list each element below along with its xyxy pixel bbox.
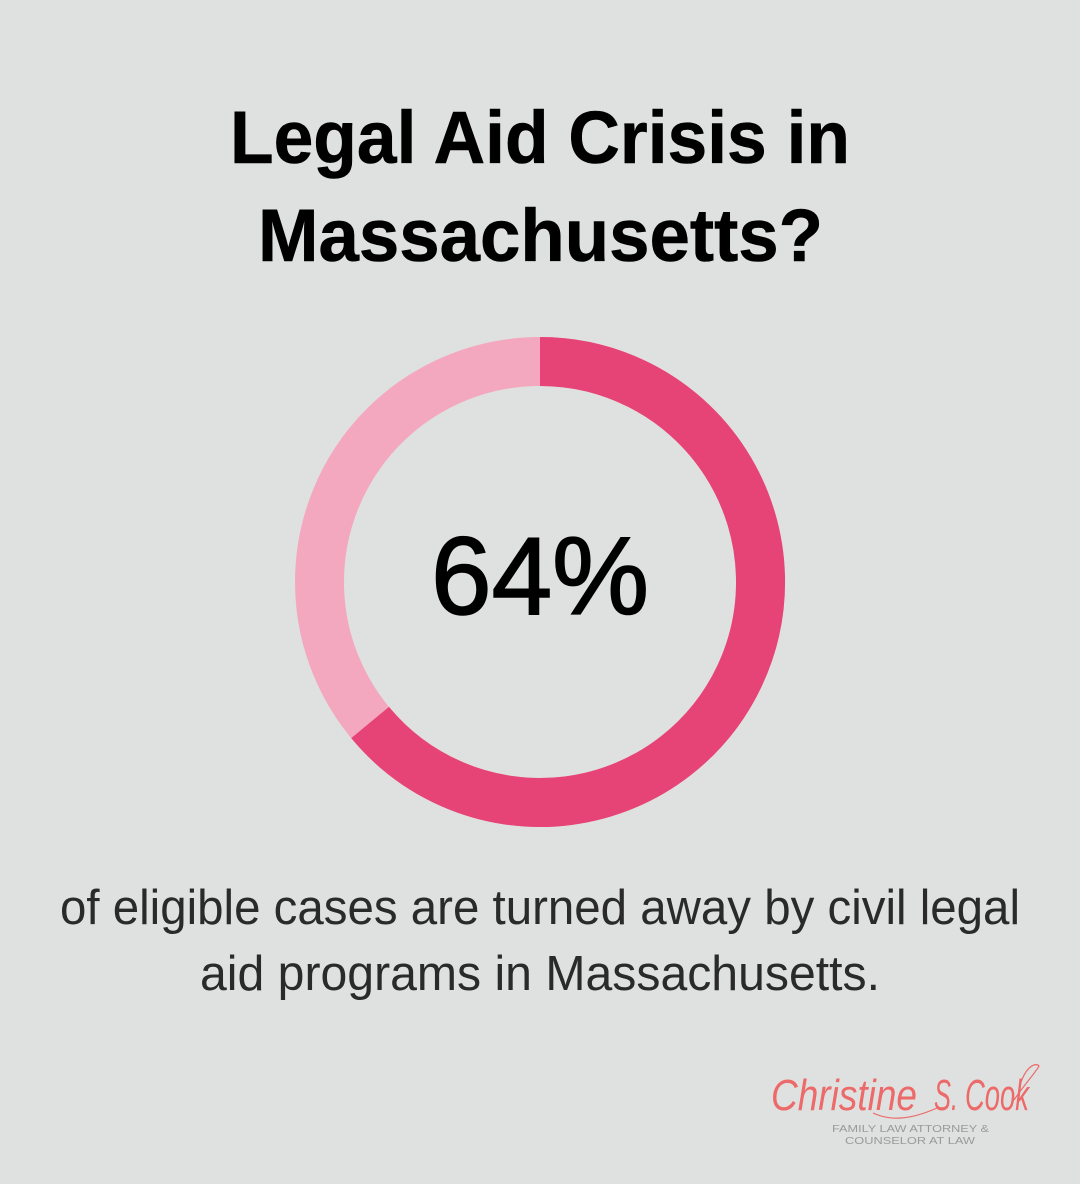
title — [230, 96, 850, 277]
description text: of eligible cases are turned away by civil legal — [60, 881, 1020, 935]
logo: Christine S. Cook: FAMILY LAW ATTORNEY & — [832, 1123, 989, 1135]
title: Massachusetts? — [258, 194, 823, 277]
description text — [60, 881, 1020, 1001]
logo: Christine S. Cook: S. — [934, 1071, 958, 1120]
logo: Christine S. Cook — [771, 1065, 1039, 1147]
description text: aid programs in Massachusetts. — [200, 947, 880, 1001]
title: Legal Aid Crisis in — [230, 96, 850, 179]
big percentage value: 64% — [431, 515, 649, 638]
logo: Christine S. Cook: COUNSELOR AT LAW — [845, 1135, 975, 1147]
donut chart: 64% — [320, 361, 761, 802]
logo: Christine S. Cook: Cook — [965, 1071, 1030, 1120]
logo: Christine S. Cook: Christine — [771, 1071, 917, 1120]
